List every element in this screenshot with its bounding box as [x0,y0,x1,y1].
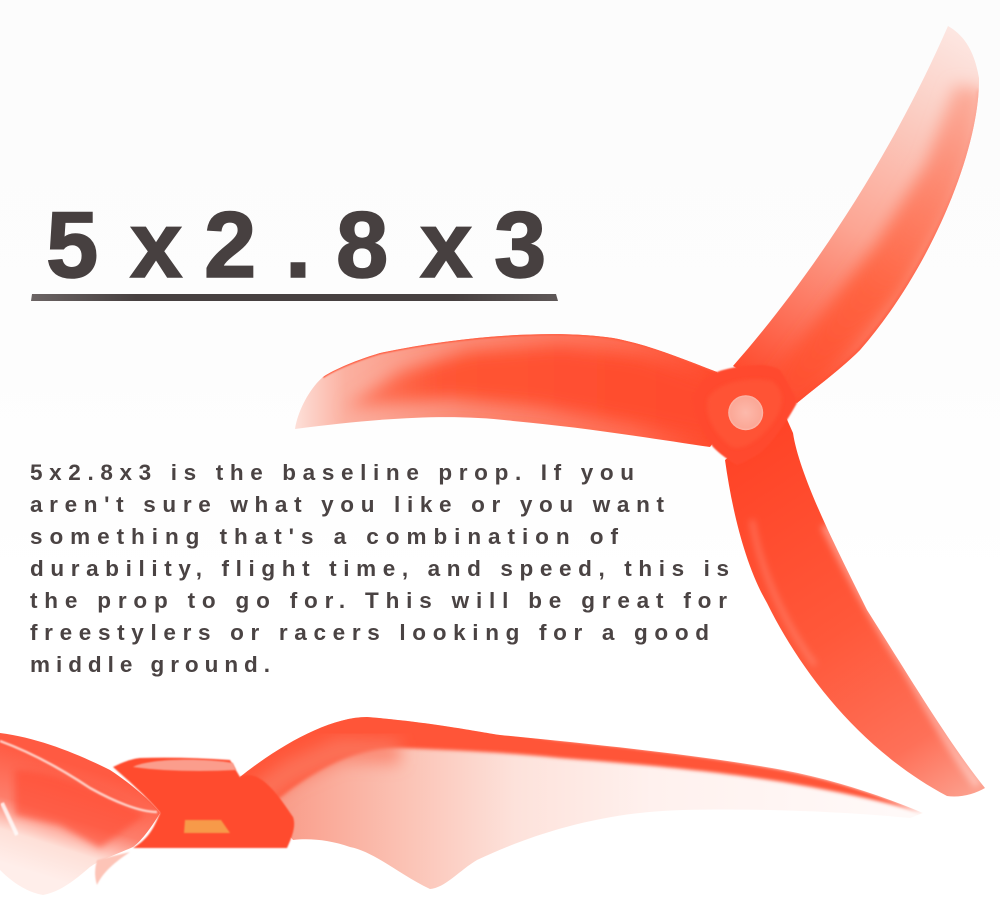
side blade: left [0,730,165,898]
description text: something that's a combination of [30,524,618,549]
side hub [113,758,294,848]
propeller side view [0,710,930,898]
description text: 5x2.8x3 is the baseline prop. If you [30,460,634,485]
description text: freestylers or racers looking for a good [30,620,709,645]
description text: durability, flight time, and speed, this is [30,556,729,581]
description text: middle ground. [30,652,270,677]
side blade: right [230,710,930,895]
title: prop size: 5x2.8x3 [46,192,546,297]
title underline [31,294,558,301]
blade: upper right [733,26,979,403]
propeller top view [290,20,990,805]
side blade tail [95,852,130,885]
hub with motor hole [692,365,797,465]
blade: left [295,334,718,447]
description text: the prop to go for. This will be great for [30,588,727,613]
blade: lower right [720,415,990,805]
description text: aren't sure what you like or you want [30,492,665,517]
